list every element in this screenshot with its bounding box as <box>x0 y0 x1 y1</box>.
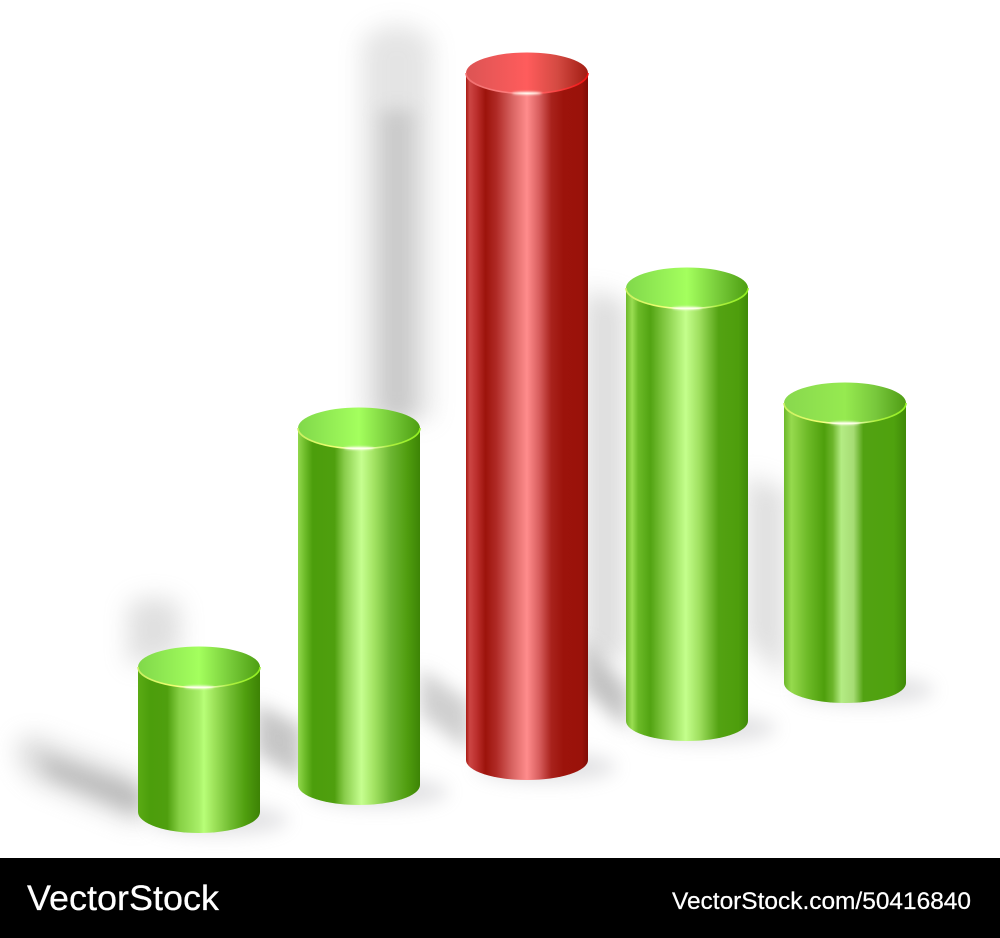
shadow: green bar 4 diagonal <box>584 640 628 730</box>
green cylinder 5 <box>784 382 906 703</box>
green cylinder 4 <box>626 268 748 741</box>
footer image id: VectorStock.com/50416840 <box>672 888 971 915</box>
shadow: green bar 4 vertical <box>584 290 626 660</box>
ground shadow: bar 4 <box>636 713 776 743</box>
red cylinder 3 (tallest) <box>466 52 588 780</box>
shadow: red bar vertical <box>362 25 432 420</box>
shadow: green bar 1 vertical <box>128 598 180 665</box>
ground shadow: bar 5 <box>794 675 934 705</box>
ground shadow: bar 1 <box>148 805 288 835</box>
shadow: red bar vertical core <box>380 110 414 420</box>
ground shadows <box>148 675 934 835</box>
shadow: red bar diagonal <box>420 668 470 752</box>
footer logo text: VectorStock <box>27 879 220 918</box>
ground shadow: bar 2 <box>308 777 448 807</box>
shadow: green bar 1 diagonal core <box>40 755 142 815</box>
shadow: green bar 1 diagonal halo <box>17 736 142 826</box>
ground shadow: bar 3 <box>476 752 616 782</box>
green cylinder 2 <box>298 408 420 805</box>
shadow: green bar 5 vertical <box>746 475 786 680</box>
green cylinder 1 <box>138 646 260 833</box>
footer bar <box>0 858 1000 938</box>
shadow: green bar 2 diagonal <box>256 703 302 780</box>
cast shadows <box>17 25 786 826</box>
